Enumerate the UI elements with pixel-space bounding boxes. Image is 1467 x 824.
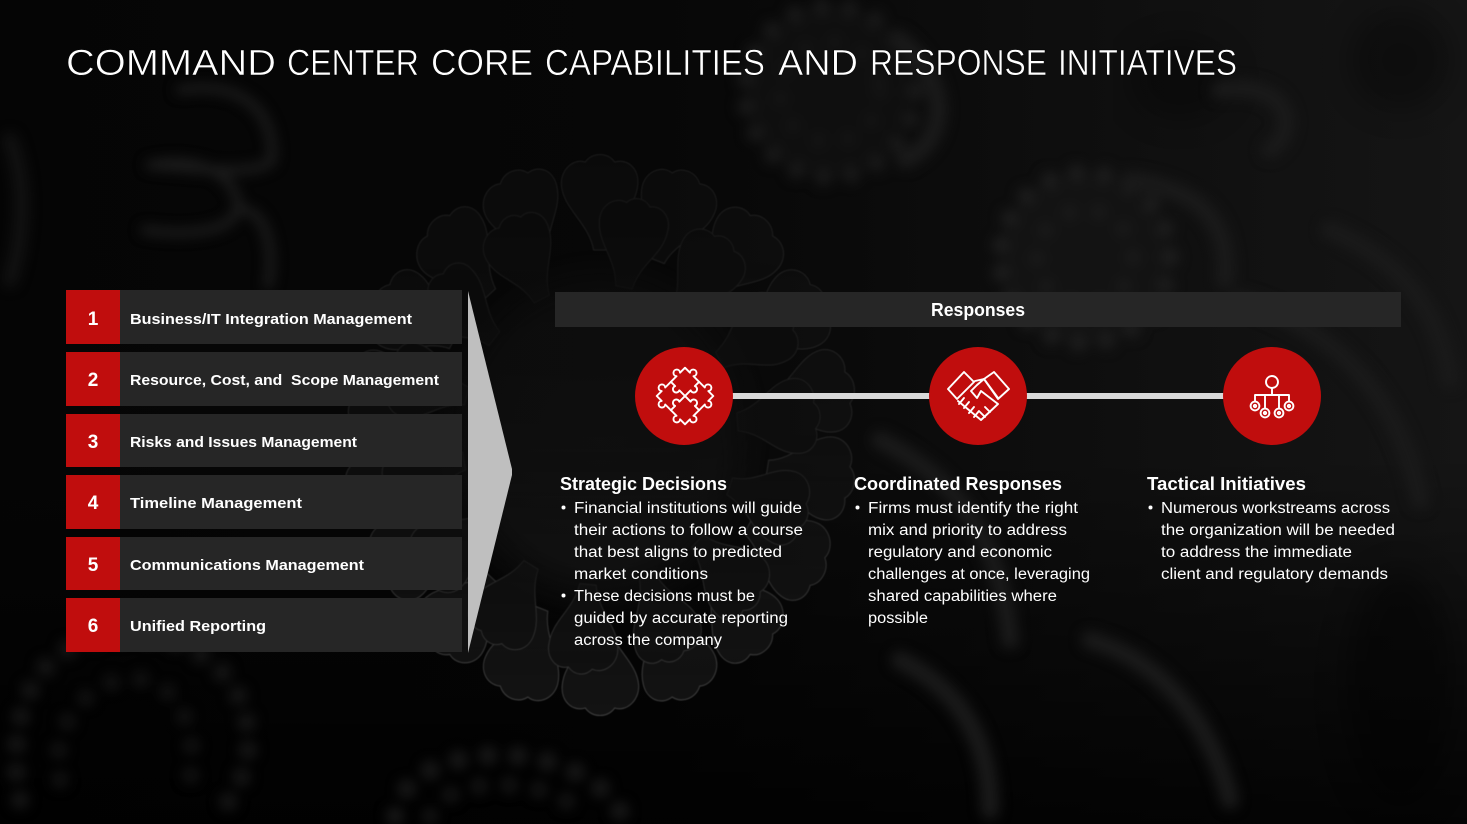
text block: Coordinated Responses: possible	[868, 610, 928, 627]
text block: Coordinated Responses	[854, 474, 1090, 627]
text block: Strategic Decisions: market conditions	[574, 566, 708, 583]
text block: Tactical Initiatives: Numerous workstreams across	[1161, 500, 1390, 517]
text block: Strategic Decisions: across the company	[574, 632, 722, 649]
icon: handshake	[929, 347, 1027, 445]
text block: Strategic Decisions: that best aligns to predicted	[574, 544, 782, 561]
text block: Coordinated Responses: Firms must identify the right	[868, 500, 1079, 517]
icon: organization hierarchy	[1223, 347, 1321, 445]
list item 4: 4	[88, 493, 99, 514]
list item 1	[66, 290, 462, 344]
list item 4: Timeline Management	[130, 495, 302, 512]
list item 5: Communications Management	[130, 557, 364, 574]
text block: Coordinated Responses: Coordinated Responses	[854, 474, 1062, 494]
text block: Tactical Initiatives: Tactical Initiatives	[1147, 474, 1306, 494]
list item 6: Unified Reporting	[130, 618, 266, 635]
text block: Coordinated Responses: challenges at once, leveraging	[868, 566, 1090, 583]
text block: Strategic Decisions: These decisions must be	[574, 588, 755, 605]
list item 5	[66, 537, 462, 590]
list item 6	[66, 598, 462, 652]
title: CENTER	[287, 42, 419, 83]
list item 3	[66, 414, 462, 467]
title: AND	[778, 42, 858, 83]
heading bar: Responses	[555, 292, 1401, 327]
list item 2	[66, 352, 462, 406]
title: RESPONSE	[870, 42, 1047, 83]
text block: Strategic Decisions	[560, 474, 803, 649]
text block: Tactical Initiatives	[1147, 474, 1395, 583]
text block: Tactical Initiatives: the organization will be needed	[1161, 522, 1395, 539]
list item 3: Risks and Issues Management	[130, 434, 357, 451]
text block: Tactical Initiatives: client and regulatory demands	[1161, 566, 1388, 583]
heading bar: Responses: Responses	[931, 300, 1025, 320]
title: CORE	[431, 42, 533, 83]
list item 4	[66, 475, 462, 529]
title	[66, 42, 1237, 83]
list item 2: Resource, Cost, and Scope Management	[130, 372, 439, 389]
text block: Strategic Decisions: Financial institutions will guide	[574, 500, 802, 517]
background: central virus illustration	[339, 154, 861, 716]
text block: Coordinated Responses: mix and priority to address	[868, 522, 1067, 539]
title: COMMAND	[66, 42, 276, 83]
list item 1: 1	[88, 309, 99, 330]
list item 1: Business/IT Integration Management	[130, 311, 412, 328]
connector line	[730, 393, 1225, 399]
text block: Strategic Decisions: guided by accurate reporting	[574, 610, 788, 627]
list item 2: 2	[88, 370, 98, 391]
text block: Coordinated Responses: regulatory and economic	[868, 544, 1052, 561]
icon: puzzle pieces	[635, 347, 733, 445]
text block: Strategic Decisions: their actions to follow a course	[574, 522, 803, 539]
title: CAPABILITIES	[545, 42, 765, 83]
arrow: capabilities to responses	[468, 291, 512, 653]
list item 3: 3	[88, 432, 98, 453]
panel: core capabilities list	[66, 290, 462, 652]
list item 6: 6	[88, 616, 98, 637]
text block: Coordinated Responses: shared capabilities where	[868, 588, 1057, 605]
title: INITIATIVES	[1058, 42, 1237, 83]
text block: Strategic Decisions: Strategic Decisions	[560, 474, 727, 494]
list item 5: 5	[88, 555, 99, 576]
text block: Tactical Initiatives: to address the immediate	[1161, 544, 1352, 561]
